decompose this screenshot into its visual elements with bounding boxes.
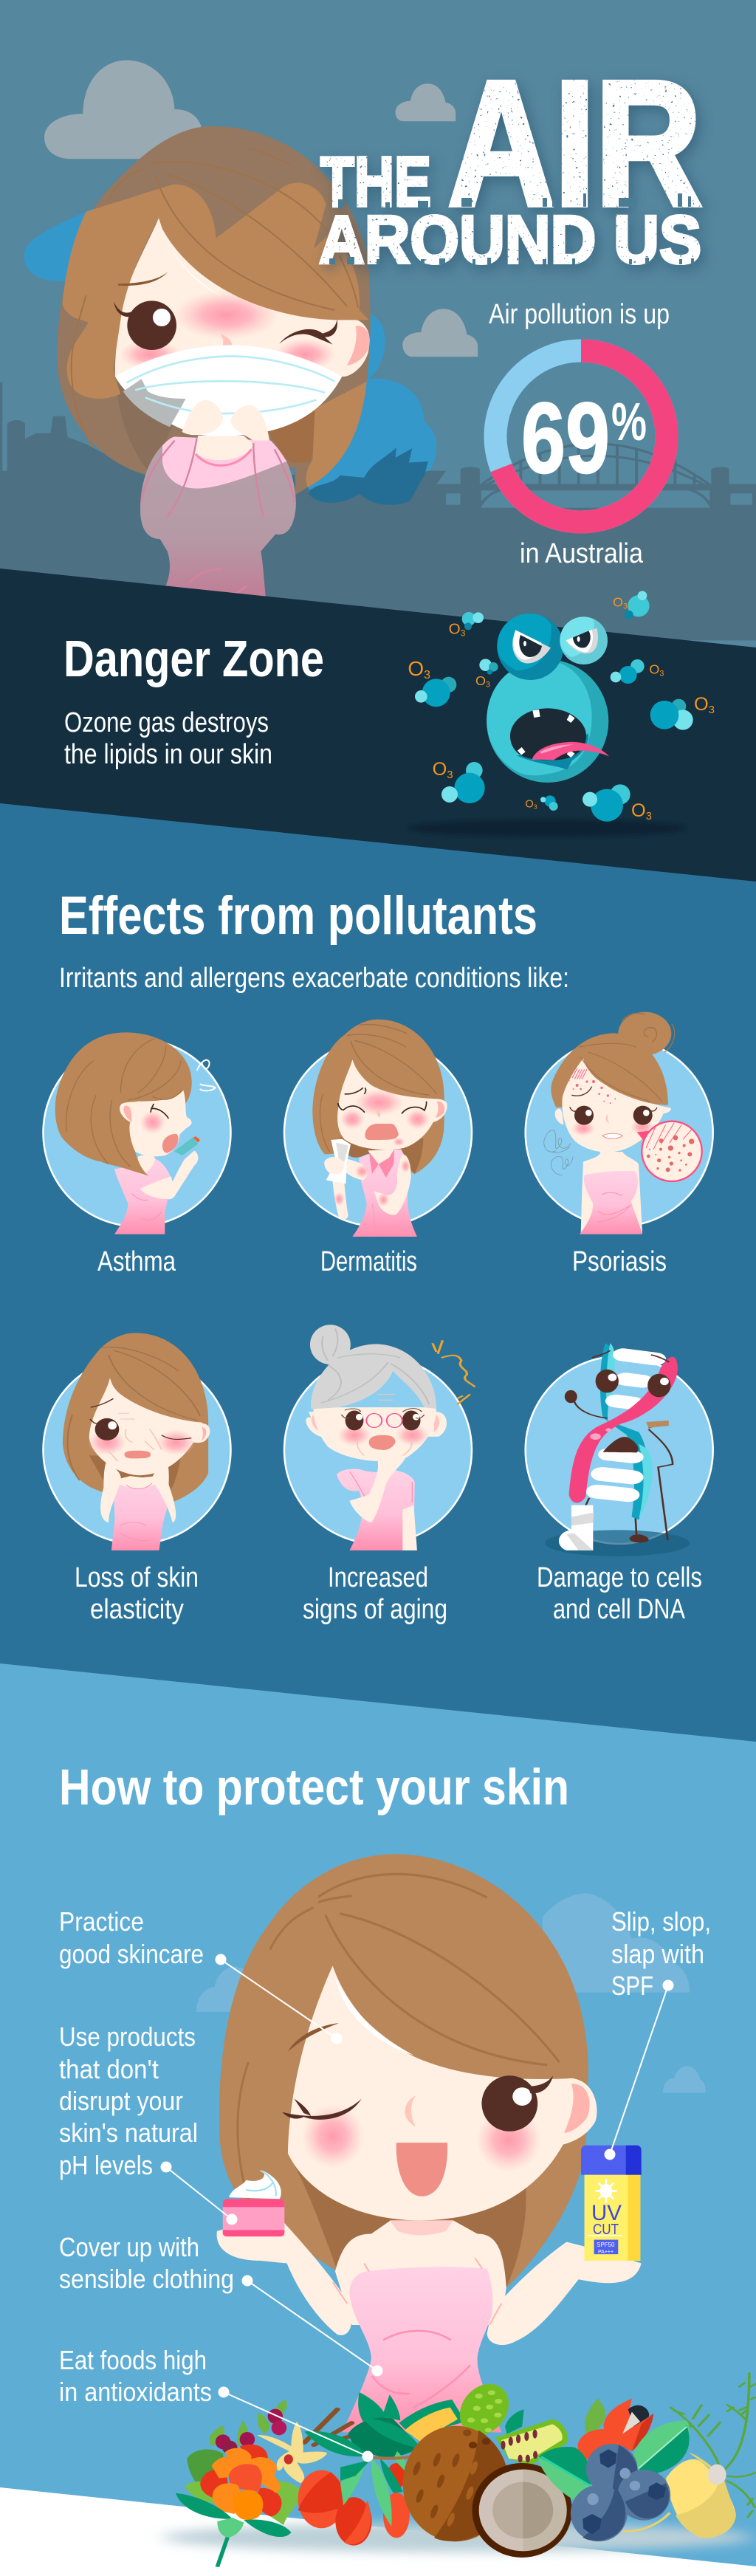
label: Psoriasis: Psoriasis <box>572 1246 667 1277</box>
O3 labels: O <box>449 620 461 637</box>
O3 labels: O <box>408 657 424 680</box>
O3 labels: 3 <box>623 602 628 611</box>
text: ozone description: Ozone gas destroys <box>64 707 269 738</box>
character: older woman <box>306 1325 475 1550</box>
bottle label: UV CUT: CUT <box>593 2222 619 2238</box>
hands <box>182 400 269 441</box>
label: Dermatitis: Dermatitis <box>320 1246 417 1277</box>
mouth <box>517 733 588 769</box>
city skyline and harbour bridge silhouette <box>0 382 756 640</box>
effect card: Psoriasis <box>526 1012 713 1234</box>
illustration: ozone monster and molecules <box>408 591 715 837</box>
character: happy girl holding cream and sunscreen <box>217 1854 642 2432</box>
pumpkin wedge <box>399 2400 465 2436</box>
tip: use gentle products: pH levels <box>59 2150 153 2180</box>
label: Damage to cells and cell DNA: Damage to cells <box>537 1562 702 1593</box>
text: ozone description: the lipids in our skin <box>64 739 272 770</box>
arms <box>217 2223 352 2335</box>
heading: Danger Zone: Danger Zone <box>63 630 324 687</box>
dress <box>343 2267 501 2432</box>
character: girl with wrinkles <box>63 1333 210 1550</box>
blueberries <box>571 2444 670 2541</box>
label: Loss of skin elasticity: Loss of skin <box>75 1562 199 1593</box>
label: Increased signs of aging: Increased <box>328 1562 428 1593</box>
O3 labels: O <box>631 800 646 821</box>
character: girl wearing a face mask <box>57 126 371 608</box>
O3 labels: 3 <box>659 669 664 678</box>
panel: white foot <box>0 2487 756 2576</box>
O3 labels <box>408 595 715 822</box>
tip: use gentle products: disrupt your <box>59 2086 183 2116</box>
centre leaves <box>304 2392 421 2527</box>
tip: use gentle products: Use products <box>59 2022 196 2052</box>
O3 labels: 3 <box>486 681 490 690</box>
tip: use gentle products: that don't <box>59 2054 159 2084</box>
O3 labels: O <box>613 595 623 610</box>
title: The Air Around Us: THE <box>320 142 431 221</box>
tip: practice good skincare: Practice <box>59 1906 144 1937</box>
green fruit <box>453 2381 515 2438</box>
right eye <box>560 616 608 664</box>
heading: Effects from pollutants: Effects from pollutants <box>59 886 537 946</box>
character: girl with inhaler <box>55 1032 216 1234</box>
face mask <box>115 345 342 436</box>
berries and leaves <box>209 2399 287 2454</box>
title: skyline notches along the letter feet <box>329 193 694 264</box>
blue cloud behind the character <box>24 207 436 505</box>
bottle label: UV CUT: SPF50 <box>597 2242 615 2248</box>
character: girl with magnified skin <box>544 1012 702 1234</box>
eye <box>127 300 176 350</box>
effect card: Damage to cells and cell DNA <box>526 1343 713 1556</box>
tip: eat antioxidants: Eat foods high <box>59 2345 207 2375</box>
effect card: Loss of skin elasticity <box>43 1333 230 1550</box>
O3 labels: 3 <box>534 803 537 811</box>
ground shadow <box>410 820 685 837</box>
O3 labels: 3 <box>461 628 466 639</box>
section background: sky <box>0 0 756 664</box>
tip: slip slop slap: Slip, slop, <box>611 1906 711 1937</box>
title: The Air Around Us: AIR <box>448 44 701 242</box>
coconut <box>403 2426 572 2558</box>
torso <box>335 2220 506 2325</box>
text: air pollution is up: Air pollution is up <box>489 299 670 330</box>
right side leaves and seed <box>537 2398 736 2538</box>
text: in Australia: in Australia <box>520 538 644 569</box>
text: irritants and allergens: Irritants and allergens exacerbate conditions like: <box>59 963 569 994</box>
blush <box>173 290 279 340</box>
bright hair <box>63 182 369 399</box>
hair back <box>57 126 371 495</box>
effect card: Asthma <box>43 1032 230 1234</box>
fern <box>670 2372 756 2518</box>
tip: eat antioxidants: in antioxidants <box>59 2377 212 2407</box>
O3 labels: O <box>649 662 659 677</box>
cloudberry <box>176 2445 303 2567</box>
panel: danger zone band <box>0 569 756 886</box>
panel: how to protect your skin <box>0 1663 756 2576</box>
ground shadow <box>162 2523 753 2552</box>
label: Loss of skin elasticity: elasticity <box>90 1594 184 1625</box>
melon slice <box>495 2419 568 2466</box>
stat: percent sign: % <box>611 393 647 452</box>
hazed dress <box>140 445 296 598</box>
O3 labels: O <box>433 759 447 780</box>
cinnamon sticks <box>304 2409 354 2445</box>
goji berries <box>298 2463 410 2546</box>
label: Asthma: Asthma <box>97 1246 176 1277</box>
O3 labels: 3 <box>709 704 715 716</box>
icon: clouds in the sky <box>44 61 478 357</box>
label: Damage to cells and cell DNA: and cell DNA <box>553 1594 686 1625</box>
character: girl with rash <box>312 1020 447 1237</box>
label: Increased signs of aging: signs of aging <box>303 1594 447 1625</box>
monster body <box>487 659 608 783</box>
food pile <box>162 2372 756 2567</box>
sunscreen bottle <box>581 2146 642 2261</box>
left eye <box>497 614 563 680</box>
bottle label: UV CUT: PA+++ <box>598 2250 614 2255</box>
bottle label: UV CUT <box>591 2201 622 2255</box>
character: injured DNA strand <box>545 1343 690 1556</box>
face <box>288 1965 574 2220</box>
bottle label: UV CUT: UV <box>591 2201 622 2225</box>
panel: effects from pollutants <box>0 803 756 1757</box>
face <box>115 218 370 377</box>
donut chart: 69 percent <box>495 351 667 522</box>
title: The Air Around Us: AROUND US <box>319 202 701 278</box>
tip: slip slop slap: SPF <box>611 1971 653 2001</box>
tip: cover up: sensible clothing <box>59 2264 234 2294</box>
effect card: Dermatitis <box>284 1020 472 1237</box>
O3 labels: O <box>694 694 709 715</box>
ozone molecules <box>415 591 693 822</box>
hair lines <box>238 1874 560 2207</box>
heading: How to protect your skin: How to protect your skin <box>59 1759 569 1816</box>
vanilla star <box>257 2422 327 2483</box>
O3 labels: 3 <box>646 811 652 822</box>
O3 labels: 3 <box>447 769 453 781</box>
tip: slip slop slap: slap with <box>611 1939 704 1969</box>
effect card: Increased signs of aging <box>284 1325 475 1550</box>
O3 labels: 3 <box>424 669 430 681</box>
title: The Air Around Us <box>319 44 701 278</box>
eyes <box>481 2075 537 2132</box>
tip: practice good skincare: good skincare <box>59 1939 204 1969</box>
cream jar <box>223 2171 284 2236</box>
icon: pale clouds <box>196 1893 705 2093</box>
stat: 69: 69 <box>521 382 610 494</box>
tip: use gentle products: skin's natural <box>59 2118 198 2148</box>
O3 labels: O <box>475 673 486 688</box>
pointer lines and dots <box>161 1954 673 2462</box>
O3 labels: O <box>525 798 534 810</box>
tip: cover up: Cover up with <box>59 2232 199 2262</box>
hair <box>219 1854 588 2287</box>
